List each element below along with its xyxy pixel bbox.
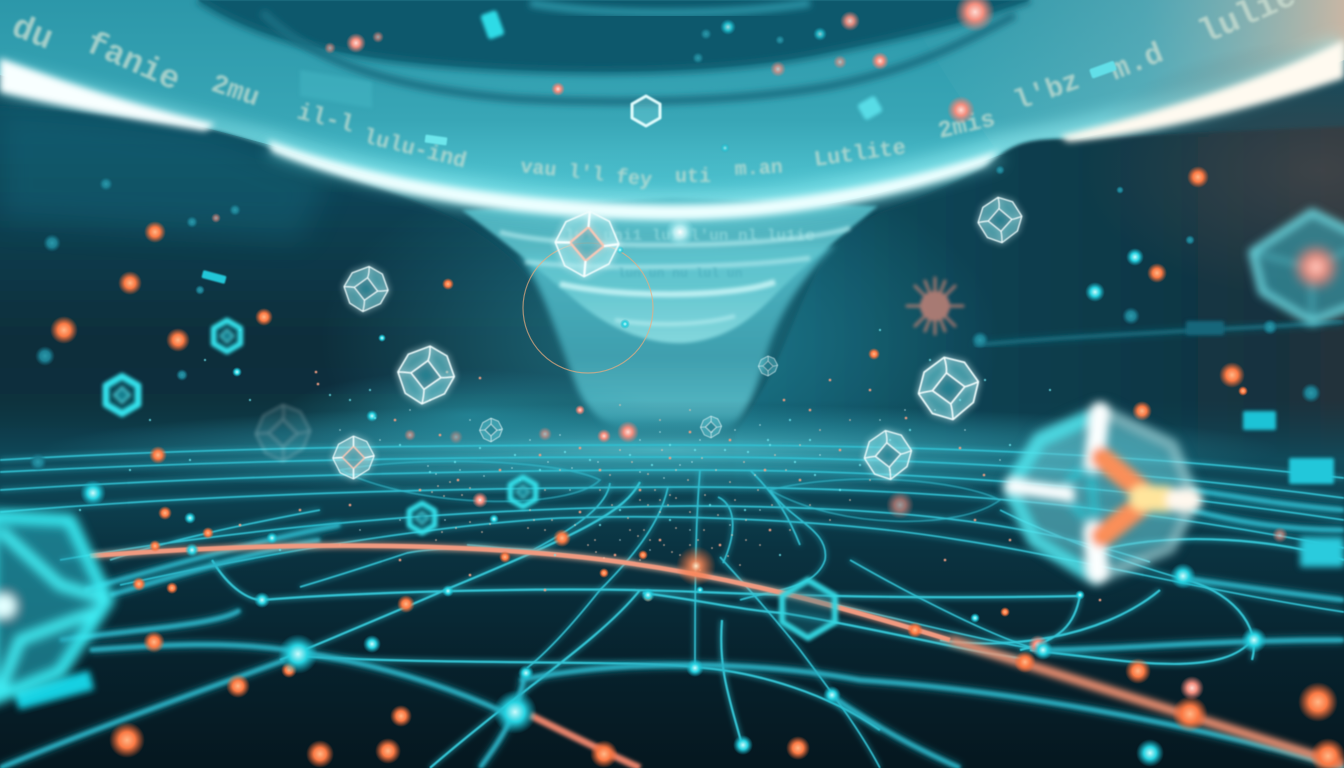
orange lower stream <box>530 715 640 768</box>
funnel bowl <box>462 198 878 343</box>
large crystal body <box>1008 408 1198 580</box>
text: curved blurred glyphs: l'bz <box>1010 66 1084 118</box>
cube: large glowing crystal <box>1008 408 1198 580</box>
lower seam <box>262 12 1015 101</box>
particles: cyan glow <box>80 246 1267 767</box>
text: curved blurred glyphs: 2mis <box>936 107 998 146</box>
pill: band centre left <box>425 135 447 145</box>
rim centre <box>268 140 1000 220</box>
pill: band right <box>1089 61 1117 79</box>
panel: funnel <box>462 198 878 432</box>
particles: fine dust <box>80 330 1100 600</box>
text: curved blurred glyphs: lulu-ind <box>360 125 469 174</box>
panel: right dark ridge <box>735 125 1344 500</box>
soft panels on the band <box>300 70 372 108</box>
crystal cubes <box>106 96 1024 638</box>
horizon glow <box>40 404 1280 496</box>
text: curved blurred glyphs: m.d <box>1106 38 1169 89</box>
ceiling band <box>0 0 1344 218</box>
text: curved blurred glyphs: uti <box>675 166 711 189</box>
network lines: near <box>0 490 1344 768</box>
pill: right 2 <box>1289 458 1334 484</box>
panel: network floor <box>0 370 1344 768</box>
upper ridge haze left <box>0 110 330 240</box>
cube 2 <box>394 342 458 408</box>
funnel white glint <box>665 217 695 247</box>
pill: right 3 <box>1300 537 1344 567</box>
rim halo over ridges <box>270 150 1000 214</box>
funnel stripes <box>500 228 850 324</box>
orange main stream left <box>90 546 950 640</box>
cube 1 <box>341 263 391 315</box>
cube 7 <box>914 353 983 424</box>
cube 4: faded <box>256 405 310 461</box>
funnel blurred text: lu1 uni1 lui l'un nl lu1ie <box>565 227 815 245</box>
pill: far right ridge <box>1186 321 1224 335</box>
light line across right ridge <box>975 322 1344 345</box>
text: curved blurred glyphs: m.an <box>734 157 783 182</box>
panel: left dark ridge <box>0 104 600 500</box>
text: curved blurred glyphs: fanie <box>80 25 185 99</box>
inner dark arch <box>198 0 1030 72</box>
top small ring cube <box>632 96 660 126</box>
warm tint at upper right <box>900 0 1344 155</box>
pill: top centre <box>480 10 505 40</box>
network lines: mid <box>212 482 1344 768</box>
teal ring cube lower <box>782 580 835 638</box>
floor gradient <box>0 400 1344 768</box>
particles: far teal dim <box>29 19 1321 471</box>
thin orange circle <box>523 243 653 373</box>
cube 8 <box>862 428 914 482</box>
pill: far left teal <box>201 270 227 284</box>
panel: curved holographic ceiling <box>0 0 1344 218</box>
rim right <box>1060 40 1344 142</box>
cyan rings <box>106 320 536 533</box>
small pale cubes <box>480 356 778 442</box>
ridge haze around funnel <box>320 150 1000 530</box>
cube: right edge blurred <box>1252 212 1344 322</box>
text: curved blurred glyphs <box>6 0 1303 193</box>
rim left <box>0 58 215 131</box>
warm corner on right ridge <box>1080 40 1344 300</box>
panel: bright rim light <box>0 40 1344 220</box>
pill: lower left <box>14 670 94 710</box>
cube 6 <box>976 195 1024 245</box>
text: curved blurred glyphs: 2mu <box>207 70 263 114</box>
network lines: far horizontals <box>0 445 1344 768</box>
orange main stream right <box>950 640 1344 765</box>
text: curved blurred glyphs: du <box>6 9 58 59</box>
large crystal facets <box>1010 410 1194 578</box>
funnel veil <box>520 245 835 432</box>
arch shadow seam <box>198 0 1030 72</box>
small bright node on network centre <box>676 546 716 586</box>
cube 5 <box>553 209 621 279</box>
soft glow above bright rim <box>0 50 1344 208</box>
text: curved blurred glyphs: vau l'l fey <box>519 156 653 193</box>
cube: bright lower left crystal <box>0 516 108 700</box>
icon: pink starburst <box>907 278 963 334</box>
pill: top right <box>857 95 883 121</box>
text: curved blurred glyphs: Lutlite <box>812 135 907 173</box>
haze below funnel left <box>280 370 660 460</box>
funnel lower text: lun un nu lul un <box>618 266 743 281</box>
text: curved blurred glyphs: il-l <box>294 100 356 140</box>
pill: right 1 <box>1243 411 1276 430</box>
crown light arc <box>530 3 810 13</box>
cube 3 <box>333 436 374 479</box>
